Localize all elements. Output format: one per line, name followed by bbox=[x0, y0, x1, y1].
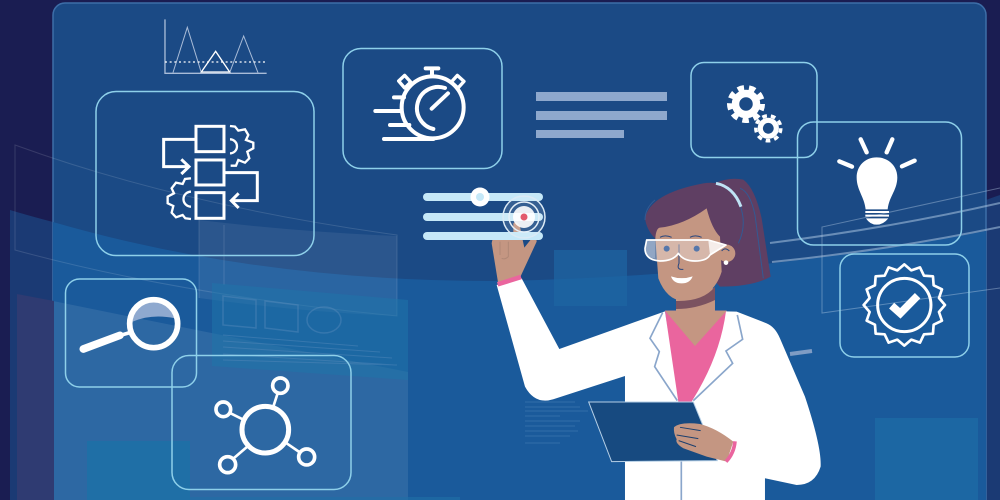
figure: scientist body bbox=[497, 278, 821, 500]
top line chart bbox=[165, 19, 267, 73]
neck shadow bbox=[676, 287, 715, 309]
faint wireframe screen panel bbox=[212, 283, 408, 380]
icon: magnifying glass bbox=[83, 299, 178, 349]
face details bbox=[645, 183, 763, 278]
holding hand bbox=[674, 423, 733, 462]
slider control bbox=[423, 188, 545, 240]
lab coat bbox=[497, 278, 821, 500]
panel: stopwatch bbox=[343, 48, 502, 168]
panel: quality badge bbox=[840, 254, 969, 357]
icon: gears bbox=[730, 88, 781, 141]
ear bbox=[718, 245, 735, 262]
panel: network bbox=[172, 356, 351, 490]
chest skin bbox=[665, 311, 727, 346]
panel: process flow bbox=[96, 92, 314, 256]
scrub top bbox=[665, 311, 727, 403]
wrist cuff bbox=[726, 441, 735, 462]
panel: light bulb bbox=[798, 122, 962, 245]
icon: badge with check bbox=[864, 264, 945, 346]
earring bbox=[724, 260, 728, 265]
icon: stopwatch bbox=[375, 68, 464, 139]
panel: magnifier bbox=[66, 279, 196, 387]
collar bbox=[650, 313, 743, 500]
raised hand bbox=[492, 222, 537, 284]
figure: scientist head bbox=[645, 179, 771, 312]
hair bbox=[645, 179, 771, 287]
touch target bbox=[503, 196, 545, 238]
icon: network nodes bbox=[216, 378, 315, 473]
panel: gray text lines bbox=[536, 92, 667, 138]
goggles bbox=[645, 240, 726, 261]
panel: gears bbox=[691, 62, 817, 158]
face bbox=[655, 208, 722, 301]
hand finger lines bbox=[677, 427, 701, 447]
neck bbox=[676, 288, 715, 312]
tablet bbox=[589, 402, 717, 462]
icon: light bulb bbox=[839, 139, 915, 225]
smile bbox=[671, 276, 693, 283]
background text lines bbox=[525, 402, 588, 443]
icon: process flow with gears bbox=[164, 126, 257, 219]
